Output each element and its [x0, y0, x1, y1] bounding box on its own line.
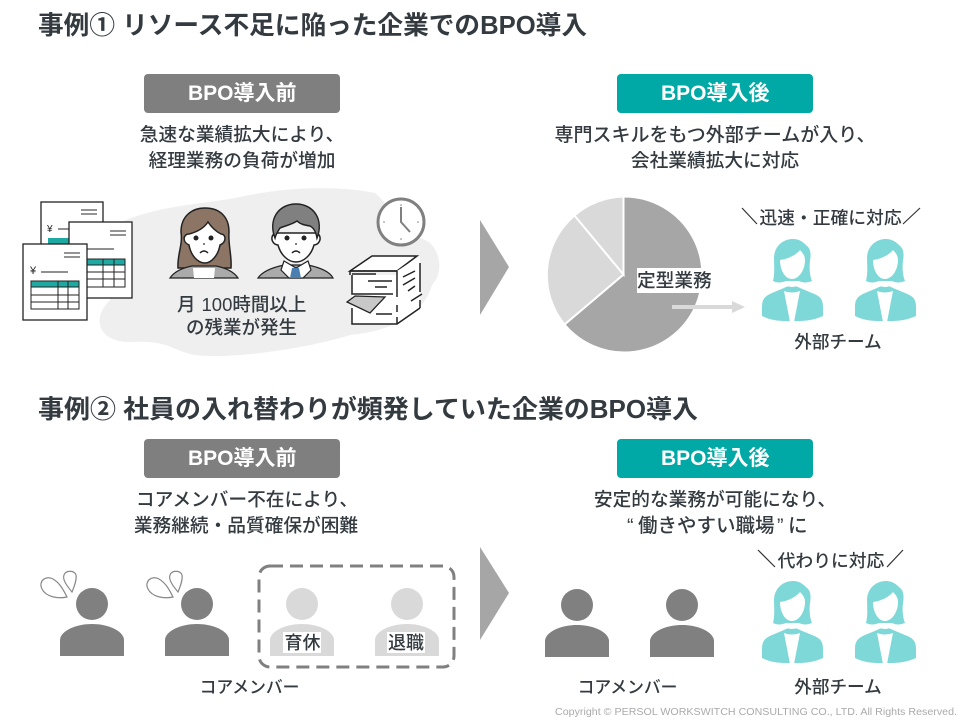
label: before BPO [144, 74, 340, 113]
text: case 1 before description: 経理業務の負荷が増加 [149, 150, 335, 171]
callout: substitute: 代わりに対応 [778, 551, 885, 571]
icon: external team [762, 581, 916, 664]
panel: case 2 after [545, 439, 916, 697]
dashed box: absent members: 退職 [388, 633, 424, 653]
label: external team: 外部チーム [794, 677, 882, 697]
label: after BPO [617, 74, 813, 113]
label: after BPO: BPO導入後 [661, 82, 770, 105]
icon: stressed members [41, 571, 229, 656]
pie label: 定型業務 [637, 270, 712, 291]
label: core members: コアメンバー [578, 678, 677, 697]
dashed box: absent members [259, 566, 454, 667]
label: after BPO: BPO導入後 [661, 447, 770, 470]
icon: woman worried [170, 208, 238, 278]
dashed box: absent members: 育休 [284, 633, 320, 653]
icon: invoices: ¥ [29, 265, 37, 277]
label: core members: コアメンバー [200, 678, 299, 697]
text: case 1 after description [555, 124, 875, 171]
title: case 1: 事例① リソース不足に陥った企業でのBPO導入 [38, 11, 587, 40]
panel: case 1 before [23, 74, 439, 356]
arrow: case 1 [480, 220, 509, 315]
text: case 2 before description: 業務継続・品質確保が困難 [134, 515, 358, 536]
arrow: to external team [672, 301, 745, 313]
icon: external team [762, 239, 916, 322]
icon: invoices [23, 202, 132, 320]
panel: case 1 after [547, 74, 920, 352]
text: case 1 before description [140, 124, 344, 171]
text: case 2 after description: 安定的な業務が可能になり、 [594, 489, 836, 510]
icon: core members [545, 589, 714, 657]
text: case 1 after description: 会社業績拡大に対応 [631, 150, 799, 171]
callout: quick response: 迅速・正確に対応 [759, 208, 902, 228]
text: case 1 before description: 急速な業績拡大により、 [140, 124, 344, 145]
text: overtime: 月 100時間以上 [177, 294, 306, 315]
label: after BPO [617, 439, 813, 478]
text: overtime: の残業が発生 [186, 317, 297, 338]
arrow: case 2 [480, 547, 509, 640]
label: external team: 外部チーム [794, 332, 882, 352]
label: before BPO: BPO導入前 [188, 447, 297, 470]
label: before BPO: BPO導入前 [188, 82, 297, 105]
text: case 2 after description: ” [777, 515, 784, 537]
label: before BPO [144, 439, 340, 478]
text: overtime [177, 294, 306, 338]
icon: man worried [258, 204, 333, 278]
text: case 2 before description [134, 489, 358, 536]
icon: clock [378, 199, 424, 245]
text: case 2 after description: 働きやすい職場 [638, 515, 775, 537]
icon: invoices: ¥ [46, 224, 53, 235]
text: case 2 before description: コアメンバー不在により、 [136, 489, 358, 510]
panel: case 2 before [41, 439, 454, 697]
icon: copier [347, 256, 422, 324]
background blob [100, 188, 439, 356]
pie chart [547, 196, 702, 352]
text: case 2 after description [594, 489, 836, 537]
text: case 1 after description: 専門スキルをもつ外部チームが入り、 [555, 124, 875, 146]
copyright: Copyright © PERSOL WORKSWITCH CONSULTING CO., LTD. All Rights Reserved. [555, 706, 957, 718]
text: case 2 after description: に [788, 515, 808, 537]
title: case 2: 事例② 社員の入れ替わりが頻発していた企業のBPO導入 [38, 394, 698, 424]
text: case 2 after description: “ [627, 515, 634, 537]
